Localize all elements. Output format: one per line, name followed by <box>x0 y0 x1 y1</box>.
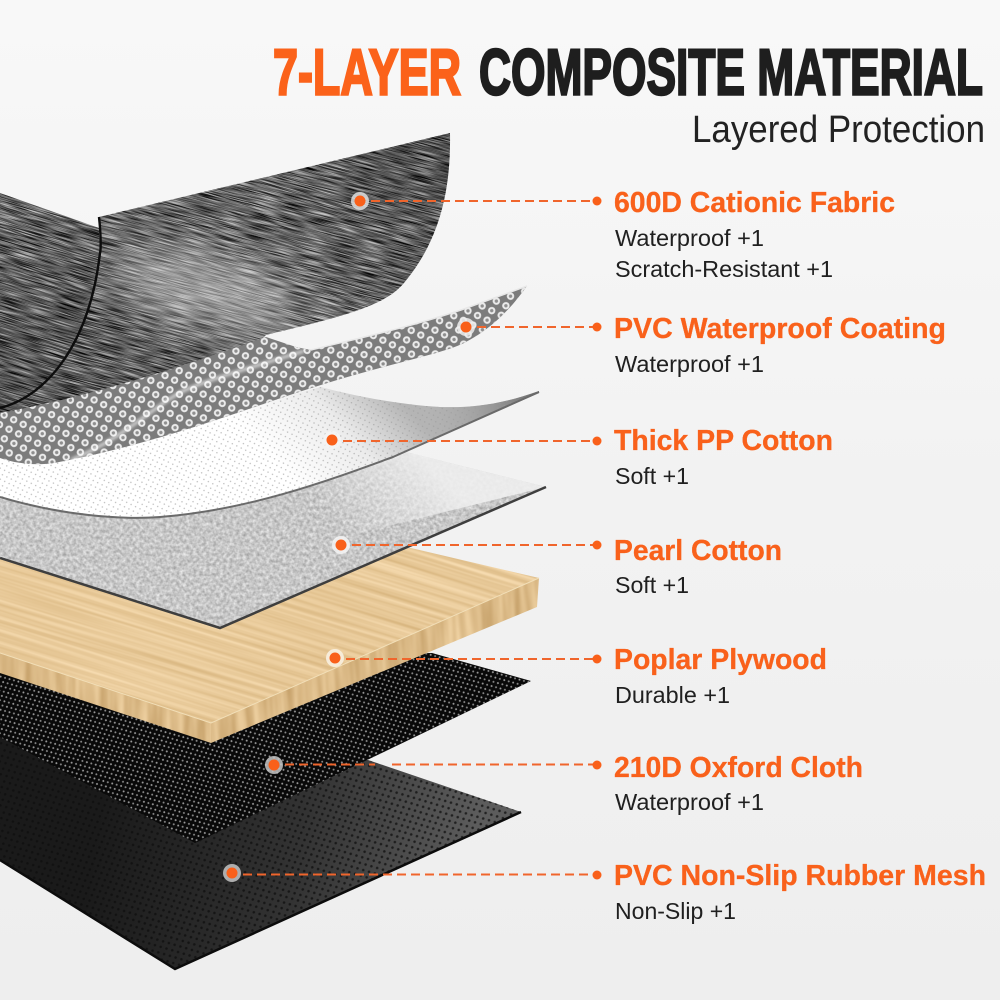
callout: 600D Cationic Fabric: 600D Cationic Fabric <box>614 187 895 219</box>
layer 2: PVC waterproof coating <box>0 286 527 464</box>
callout: Pearl Cotton <box>332 535 782 598</box>
callout: Thick PP Cotton: Soft +1 <box>615 463 689 489</box>
callout: PVC Waterproof Coating: PVC Waterproof Coating <box>614 313 946 345</box>
callout: PVC Waterproof Coating <box>457 313 946 377</box>
callout: Pearl Cotton: Soft +1 <box>615 572 689 598</box>
callout: Poplar Plywood: Poplar Plywood <box>614 644 827 676</box>
callout: Pearl Cotton: Pearl Cotton <box>614 535 782 567</box>
layer 1: 600D cationic fabric <box>0 133 450 413</box>
title <box>273 36 983 108</box>
callout: 600D Cationic Fabric: Waterproof +1 <box>615 225 764 251</box>
callout: 210D Oxford Cloth: Waterproof +1 <box>615 789 764 815</box>
callout: 600D Cationic Fabric <box>351 187 895 282</box>
callout: PVC Non-Slip Rubber Mesh <box>223 860 986 924</box>
callout: 210D Oxford Cloth <box>265 752 863 815</box>
title: 7-LAYER <box>273 36 461 108</box>
layer 7: PVC non-slip rubber mesh <box>0 720 521 969</box>
callout: PVC Waterproof Coating: Waterproof +1 <box>615 351 764 377</box>
callout: Thick PP Cotton <box>323 425 833 489</box>
layer 4: pearl cotton <box>0 452 546 630</box>
callout: PVC Non-Slip Rubber Mesh: Non-Slip +1 <box>615 898 736 924</box>
callout: 210D Oxford Cloth: 210D Oxford Cloth <box>614 752 863 784</box>
callout: Thick PP Cotton: Thick PP Cotton <box>614 425 833 457</box>
layer 3: thick PP cotton <box>0 387 539 518</box>
layer 5: poplar plywood board <box>0 548 540 743</box>
callout: 600D Cationic Fabric: Scratch-Resistant +1 <box>615 256 833 282</box>
callout: PVC Non-Slip Rubber Mesh: PVC Non-Slip Rubber Mesh <box>614 860 986 892</box>
callout: Poplar Plywood: Durable +1 <box>615 682 730 708</box>
layer 6: 210D Oxford cloth <box>0 653 531 843</box>
callout: Poplar Plywood <box>326 644 827 708</box>
